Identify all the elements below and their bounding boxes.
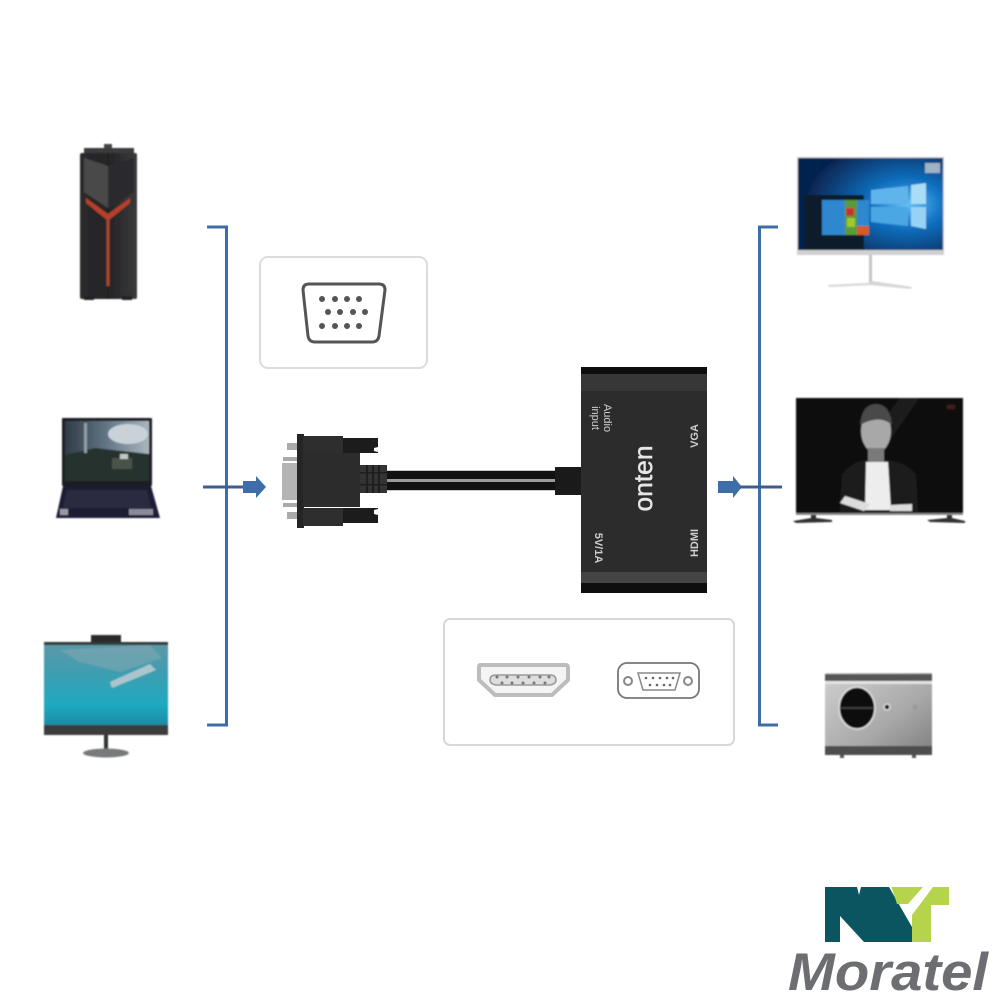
bracket: output displays <box>740 227 782 725</box>
icon: HDMI connector <box>479 665 568 695</box>
brand label: onten <box>628 446 658 512</box>
port label: Audio: Audio <box>601 404 613 432</box>
icon: VGA connector <box>303 284 385 342</box>
port label: HDMI: HDMI <box>689 529 701 557</box>
adapter box <box>581 367 707 593</box>
logo: Moratel <box>788 887 989 1000</box>
arrow: input to adapter <box>243 476 266 498</box>
VGA cable and plug <box>282 434 582 528</box>
icon: desktop tower PC <box>80 144 137 300</box>
icon: laptop <box>56 418 160 518</box>
port label: input: input <box>589 406 601 430</box>
panel: HDMI and AV ports <box>444 619 734 745</box>
icon: desktop monitor <box>797 157 944 289</box>
port label: 5V/1A: 5V/1A <box>592 533 604 563</box>
icon: projector <box>825 673 932 758</box>
bracket: source devices <box>203 227 247 725</box>
icon: television <box>793 398 965 523</box>
logo mark <box>825 887 949 942</box>
icon: all-in-one computer <box>44 635 168 758</box>
icon: serial connector <box>618 663 699 698</box>
arrow: adapter to displays <box>718 476 742 498</box>
panel: VGA port <box>260 257 427 368</box>
port label: VGA: VGA <box>689 424 701 448</box>
